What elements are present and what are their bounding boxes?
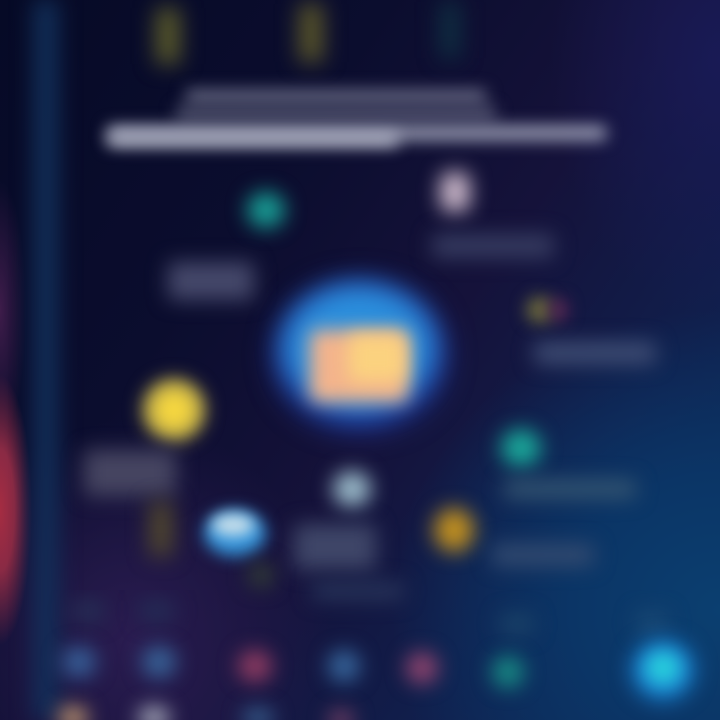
title <box>96 80 616 158</box>
text block: right bottom label <box>492 544 594 566</box>
icon: amber circle <box>434 508 474 552</box>
central icon <box>257 261 462 448</box>
bottom icon blue 3 <box>328 650 360 682</box>
text block: left lower label <box>84 450 176 496</box>
central icon inner card <box>310 330 408 402</box>
bottom icon cyan glow <box>632 640 694 700</box>
left vertical blue stripe <box>34 0 58 720</box>
green small bar <box>250 564 272 586</box>
text block: upper left label <box>168 262 254 300</box>
cloud blue body <box>204 510 266 556</box>
bottom row of icons <box>46 599 707 720</box>
olive bar lower left <box>150 502 172 556</box>
title line three <box>108 126 606 140</box>
icon part pink <box>550 298 568 322</box>
bottom icon teal <box>492 656 524 688</box>
bottom edge rose <box>328 710 354 720</box>
text block: centre lower second label <box>312 582 404 600</box>
top olive bar right <box>299 4 323 62</box>
central icon blue disc <box>284 286 434 410</box>
title line two <box>176 108 496 119</box>
icon: cloud <box>193 498 277 568</box>
top teal faint bar <box>440 2 460 58</box>
central icon inner highlight <box>348 334 406 382</box>
bottom edge blue <box>242 708 274 720</box>
icon: pale top right <box>440 172 470 212</box>
icon: pale circle <box>333 471 371 507</box>
icon: yellow sun <box>130 366 218 453</box>
cloud light top <box>212 514 254 536</box>
bottom icon pink <box>406 652 438 684</box>
title line three accent <box>108 134 398 146</box>
bottom icon cyan core <box>646 652 680 684</box>
text block: centre lower label <box>294 524 376 570</box>
bottom label faint 1 <box>72 600 104 622</box>
icon: multicolour right <box>518 288 575 332</box>
icon part olive <box>526 296 554 324</box>
bottom icon blue 2 <box>142 646 176 678</box>
central icon halo <box>274 280 446 430</box>
bottom label faint 4 <box>636 612 668 634</box>
text block: right label <box>534 342 656 364</box>
bottom icon blue 1 <box>62 646 96 678</box>
text block: right lower label <box>504 480 636 498</box>
icon: teal right <box>501 429 541 467</box>
text block: top right label <box>432 234 554 258</box>
title line one <box>186 90 486 103</box>
bottom label faint 2 <box>140 600 174 622</box>
sun halo <box>142 378 206 442</box>
top olive bar left <box>156 8 180 64</box>
bottom label faint 3 <box>500 614 534 634</box>
bottom edge peach <box>58 706 88 720</box>
bottom icon rose <box>238 650 272 682</box>
sun core <box>152 388 196 432</box>
icon: teal top <box>247 192 285 228</box>
bottom edge pale <box>138 706 170 720</box>
